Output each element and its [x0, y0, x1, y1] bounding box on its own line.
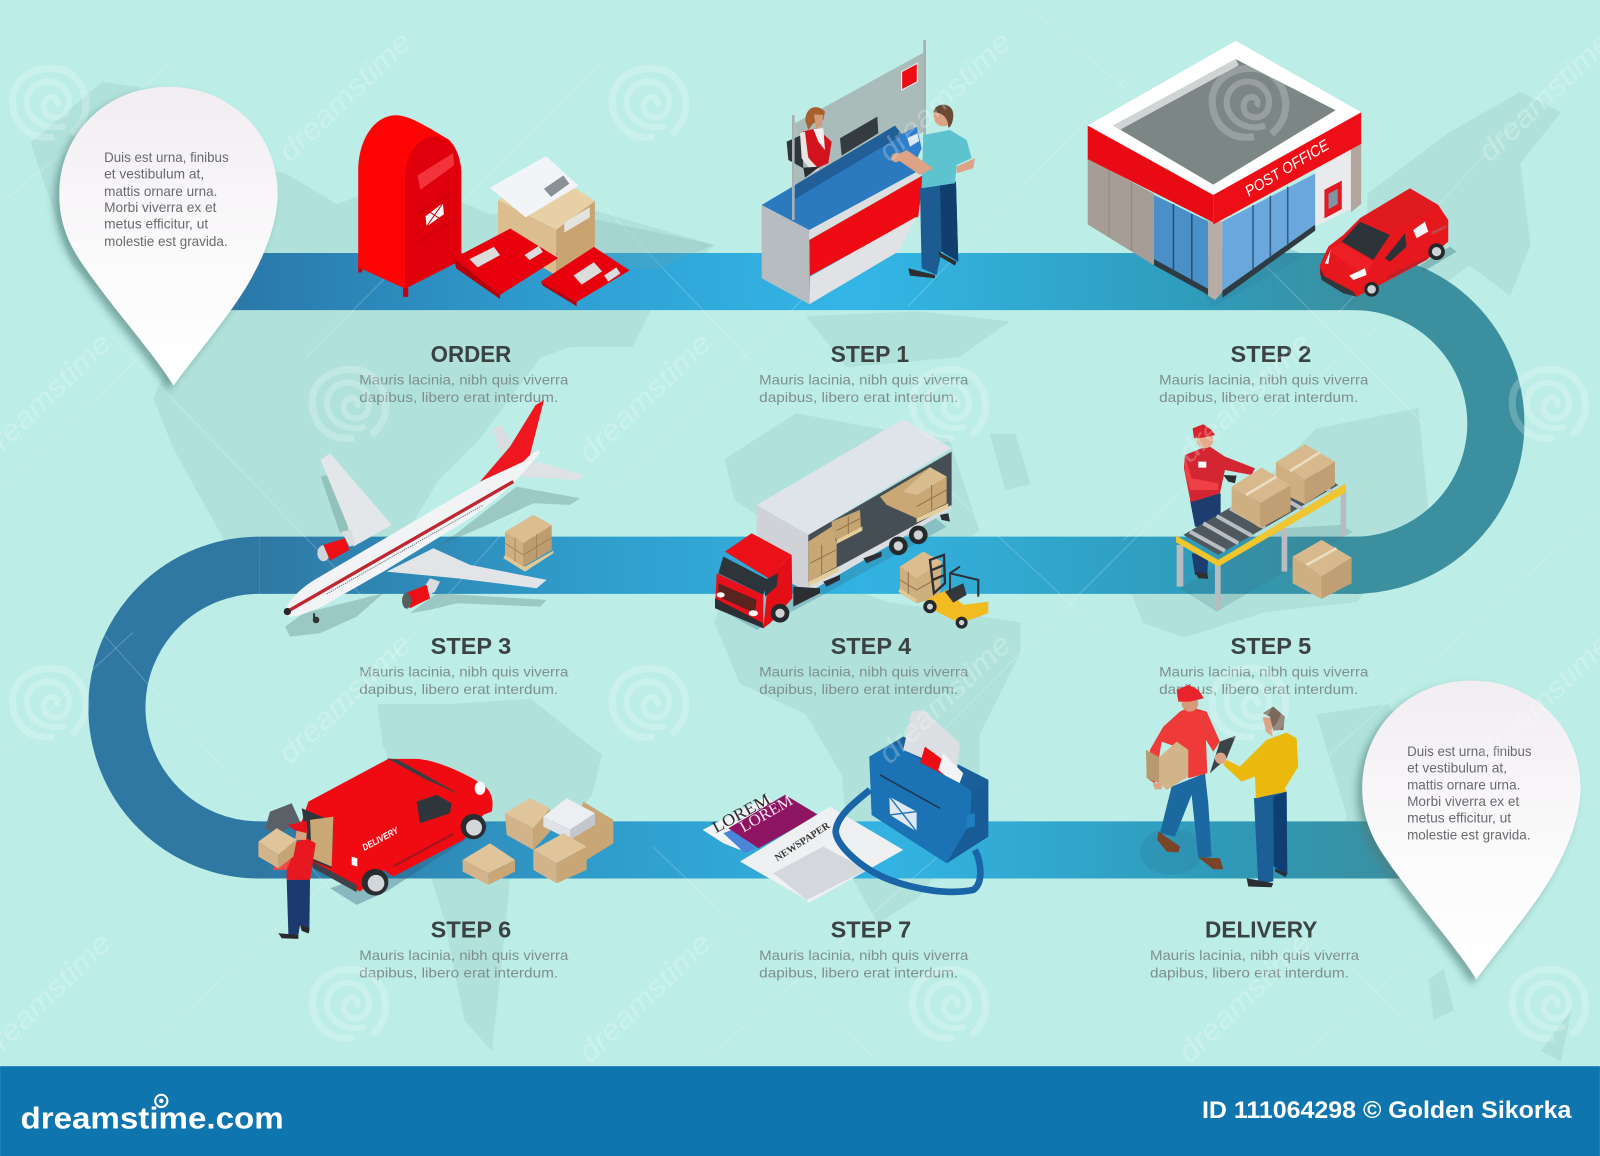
- watermark text: dreamstime: [572, 326, 718, 469]
- label: step 4: Mauris lacinia, nibh quis viverra: [759, 664, 968, 680]
- icon: post office building: [1088, 41, 1361, 306]
- customer: [1215, 707, 1298, 887]
- courier: [1146, 685, 1236, 869]
- customer: [891, 105, 975, 278]
- label: step 1: [759, 341, 968, 406]
- watermark text: dreamstime: [872, 25, 1018, 168]
- label: step 4: dapibus, libero erat interdum.: [759, 682, 958, 698]
- label: step 2: dapibus, libero erat interdum.: [1159, 390, 1358, 406]
- label: step 1: STEP 1: [831, 341, 909, 367]
- footer bar: [0, 1066, 1600, 1156]
- icon: newspapers and magazines: LOREM: [709, 789, 774, 837]
- icon: newspapers and magazines: [703, 789, 903, 903]
- truck cab: [715, 533, 792, 628]
- label: step 3: Mauris lacinia, nibh quis viverra: [359, 664, 568, 680]
- icon: red mailbox with parcels: [358, 115, 714, 306]
- icon: courier hands parcel to customer: [1140, 685, 1298, 887]
- pin callout: bottom right: molestie est gravida.: [1407, 828, 1531, 843]
- label: step 6: STEP 6: [431, 917, 511, 943]
- label: step 2: Mauris lacinia, nibh quis viverra: [1159, 373, 1368, 389]
- label: step 5: STEP 5: [1231, 633, 1311, 659]
- label: delivery: DELIVERY: [1205, 917, 1318, 943]
- label: step 1: Mauris lacinia, nibh quis viverra: [759, 373, 968, 389]
- watermark text: dreamstime: [272, 25, 418, 168]
- icon: red truck with trailer: [715, 419, 988, 630]
- icon: newspapers and magazines: LOREM: [737, 792, 796, 836]
- delivery route: [117, 282, 1496, 850]
- icon: blue mail bag: [836, 710, 988, 892]
- label: step 4: STEP 4: [831, 633, 911, 659]
- watermark text: dreamstime: [572, 926, 718, 1069]
- footer credit: ID 111064298 © Golden Sikorka: [1202, 1097, 1572, 1124]
- label: step 7: Mauris lacinia, nibh quis viverra: [759, 948, 968, 964]
- label: step 6: [359, 917, 568, 981]
- pallets in trailer: [808, 467, 948, 587]
- engine: left: [317, 530, 355, 561]
- label: order: dapibus, libero erat interdum.: [359, 390, 558, 406]
- pin callout: top left: mattis ornare urna.: [104, 184, 217, 199]
- pin callout: bottom right: metus efficitur, ut: [1407, 810, 1511, 825]
- icon: small red van: [1320, 188, 1457, 297]
- label: step 4: [759, 633, 968, 698]
- worker: [1184, 424, 1255, 579]
- label: step 3: [359, 633, 568, 698]
- pin callout: bottom right: [1357, 681, 1581, 985]
- icon: post office counter with clerk and customer: [762, 40, 975, 304]
- icon: airplane: [284, 400, 583, 637]
- pin callout: bottom right: et vestibulum at,: [1407, 760, 1507, 775]
- icon: red parcels: [454, 229, 630, 306]
- watermark text: dreamstime: [1172, 326, 1318, 469]
- icon: cardboard box with envelopes: [490, 156, 595, 275]
- pin callout: top left: et vestibulum at,: [104, 167, 204, 182]
- label: step 2: STEP 2: [1231, 341, 1311, 367]
- label: order: Mauris lacinia, nibh quis viverra: [359, 373, 568, 389]
- label: step 3: dapibus, libero erat interdum.: [359, 682, 558, 698]
- worker carrying a box: [258, 821, 316, 939]
- footer logo: dreamstime.com: [20, 1101, 284, 1135]
- icon: conveyor with worker and boxes: [1176, 424, 1353, 612]
- label: step 2: [1159, 341, 1368, 406]
- pin callout: bottom right: mattis ornare urna.: [1407, 778, 1520, 793]
- label: step 7: [759, 917, 968, 981]
- label: step 5: [1159, 633, 1368, 698]
- forklift with pallet: [898, 552, 988, 629]
- pin callout: top left: molestie est gravida.: [104, 234, 228, 249]
- watermark text: dreamstime: [272, 627, 418, 770]
- pin callout: bottom right: Morbi viverra ex et: [1407, 794, 1519, 809]
- label: order: ORDER: [431, 341, 511, 367]
- engine: right: [402, 578, 440, 609]
- label: step 6: Mauris lacinia, nibh quis viverra: [359, 948, 568, 964]
- pin callout: top left: [54, 87, 278, 391]
- label: step 5: Mauris lacinia, nibh quis viverra: [1159, 664, 1368, 680]
- label: delivery: Mauris lacinia, nibh quis viverra: [1150, 948, 1359, 964]
- icon: red delivery van with worker and boxes: DELIVERY: [361, 825, 401, 853]
- icon: post office building: POST OFFICE: [1242, 137, 1333, 200]
- pin callout: top left: Duis est urna, finibus: [104, 150, 229, 165]
- label: step 6: dapibus, libero erat interdum.: [359, 965, 558, 981]
- watermark text: dreamstime: [1172, 926, 1318, 1069]
- icon: newspapers and magazines: NEWSPAPER: [773, 820, 833, 864]
- label: delivery: dapibus, libero erat interdum.: [1150, 965, 1349, 981]
- label: step 7: STEP 7: [831, 917, 911, 943]
- label: step 5: dapibus, libero erat interdum.: [1159, 682, 1358, 698]
- icon: pallet of boxes: [503, 515, 553, 572]
- label: order: [359, 341, 568, 406]
- label: step 3: STEP 3: [431, 633, 511, 659]
- cardboard boxes: [463, 798, 613, 885]
- pin callout: top left: Morbi viverra ex et: [104, 200, 217, 215]
- icon: red delivery van with worker and boxes: [258, 758, 613, 939]
- label: step 7: dapibus, libero erat interdum.: [759, 965, 958, 981]
- conveyor boxes: [1232, 444, 1352, 599]
- pin callout: top left: metus efficitur, ut: [104, 217, 208, 232]
- watermark text: dreamstime: [872, 627, 1018, 770]
- label: delivery: [1150, 917, 1359, 981]
- label: step 1: dapibus, libero erat interdum.: [759, 390, 958, 406]
- pin callout: bottom right: Duis est urna, finibus: [1407, 744, 1532, 759]
